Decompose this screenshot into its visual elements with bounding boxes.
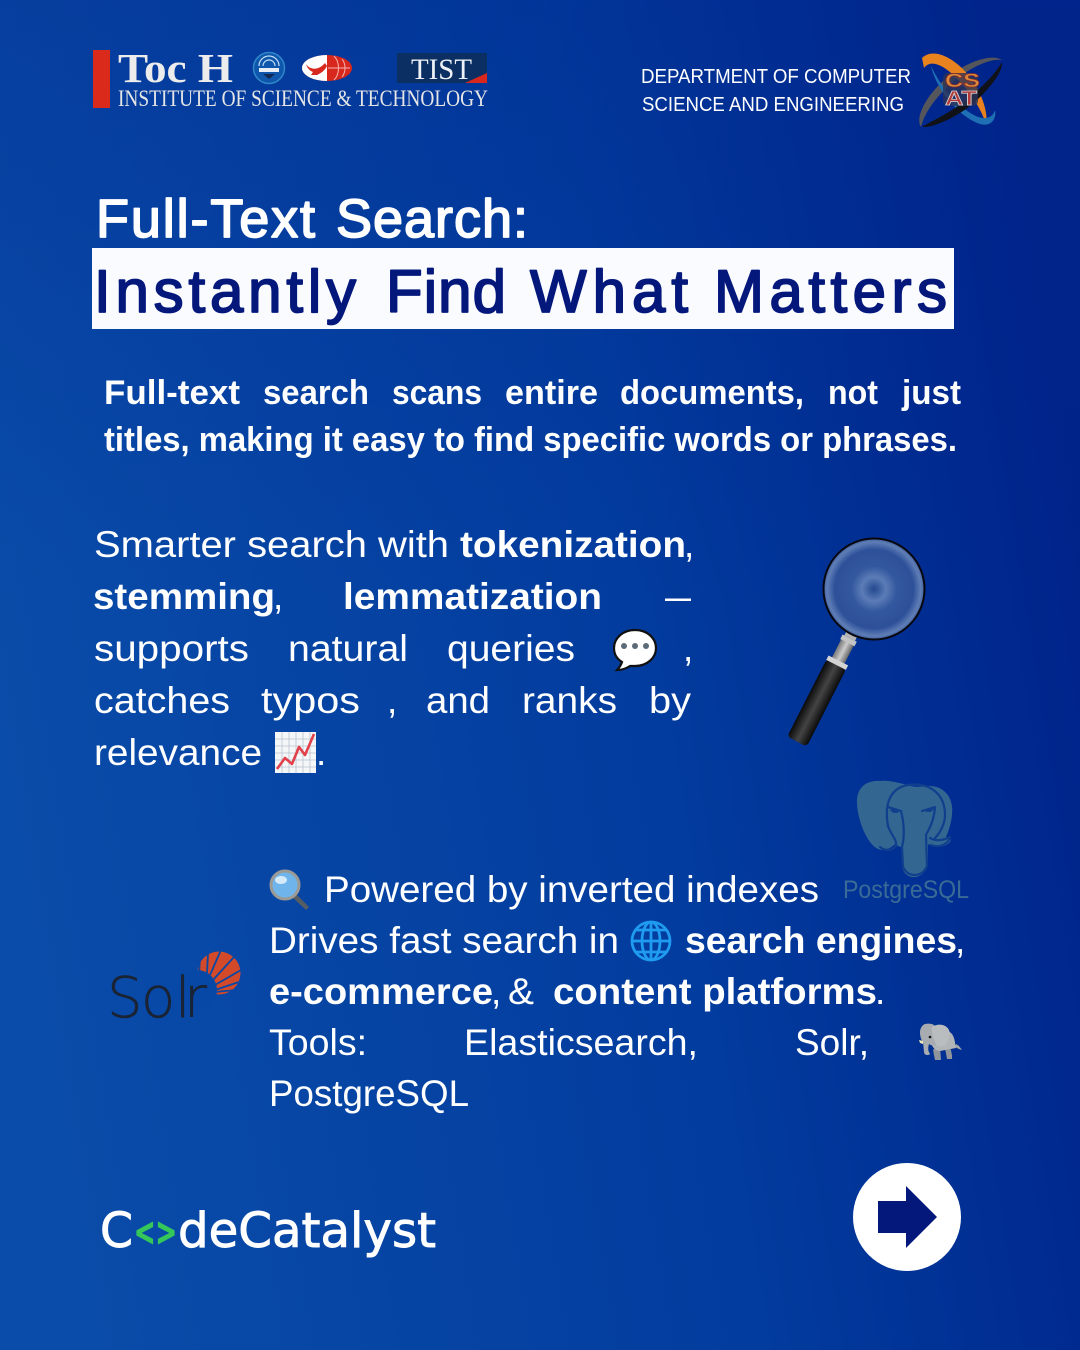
text: powered by inverted indexes: , — [955, 920, 965, 961]
text: powered by inverted indexes — [269, 869, 965, 1114]
logo: Toc H Institute of Science & Technology: TIST — [411, 53, 472, 86]
text: powered by inverted indexes: Drives fast search in — [269, 920, 619, 961]
title: Search: — [336, 189, 528, 249]
text: powered by inverted indexes: & — [508, 971, 534, 1012]
logo: CSAT: CS — [945, 71, 980, 92]
text: smarter search: lemmatization — [343, 576, 602, 617]
text: powered by inverted indexes: content platforms — [553, 971, 877, 1012]
logo: Solr — [107, 950, 241, 1031]
logo: CSAT: AT — [945, 88, 977, 110]
logo: CodeCatalyst: C — [100, 1203, 133, 1259]
text: smarter search: and — [426, 680, 490, 721]
text: powered by inverted indexes: Tools: — [269, 1022, 367, 1063]
text: powered by inverted indexes: e-commerce — [269, 971, 493, 1012]
text: smarter search: , — [387, 680, 397, 721]
text: smarter search: by — [649, 680, 692, 721]
logo: CSAT — [919, 53, 1002, 127]
intro text: scans — [392, 374, 482, 412]
intro text: not — [828, 374, 878, 412]
logo: PostgreSQL — [843, 781, 969, 904]
intro text — [104, 374, 961, 459]
title highlight — [92, 248, 954, 329]
icon: magnifying glass — [787, 538, 924, 747]
text: smarter search: tokenization — [460, 524, 686, 565]
text: smarter search: natural — [288, 628, 408, 669]
logo: Toc H Institute of Science & Technology: Toc H — [118, 45, 233, 91]
text: powered by inverted indexes: , — [491, 971, 501, 1012]
logo: CodeCatalyst: <> — [134, 1210, 177, 1254]
intro text: search — [263, 374, 369, 412]
text: powered by inverted indexes: PostgreSQL — [269, 1073, 469, 1114]
text: smarter search: typos — [261, 680, 360, 721]
text: smarter search: — — [665, 576, 691, 617]
text: smarter search: , — [684, 524, 694, 565]
title highlight: Find — [386, 258, 506, 325]
text: smarter search: catches — [94, 680, 230, 721]
department name: DEPARTMENT OF COMPUTER — [641, 66, 911, 88]
text: smarter search: , — [683, 628, 693, 669]
text: smarter search: . — [316, 732, 326, 773]
text: powered by inverted indexes: Solr, — [795, 1022, 869, 1063]
arrow button — [853, 1163, 961, 1271]
icon: globe — [632, 922, 670, 960]
icon: elephant emoji — [919, 1024, 962, 1060]
text: smarter search — [93, 524, 694, 773]
intro text: Full-text — [104, 374, 240, 412]
department name — [641, 66, 911, 116]
logo: Toc H Institute of Science & Technology: INSTITUTE OF SCIENCE & TECHNOLOGY — [118, 86, 488, 112]
logo: Solr: Solr — [107, 966, 207, 1031]
title highlight: What — [530, 258, 688, 325]
text: smarter search: , — [273, 576, 283, 617]
text: powered by inverted indexes: search engines — [685, 920, 957, 961]
logo: CodeCatalyst: deCatalyst — [178, 1203, 436, 1259]
title highlight: Matters — [714, 258, 947, 325]
icon: speech bubble — [614, 630, 656, 670]
text: smarter search: stemming — [93, 576, 275, 617]
intro text: just — [901, 374, 961, 412]
text: smarter search: ranks — [522, 680, 617, 721]
title: Full-Text — [96, 189, 315, 249]
intro text: documents, — [620, 374, 804, 412]
intro text: entire — [505, 374, 598, 412]
title highlight: Instantly — [94, 258, 356, 325]
department name: SCIENCE AND ENGINEERING — [642, 94, 904, 116]
icon: search magnifier emoji — [271, 871, 309, 910]
text: smarter search: supports — [94, 628, 249, 669]
text: smarter search: queries — [447, 628, 575, 669]
intro text: titles, making it easy to find specific words or phrases. — [104, 421, 957, 459]
text: powered by inverted indexes: Elasticsearch, — [464, 1022, 698, 1063]
title — [92, 189, 954, 329]
text: smarter search: relevance — [94, 732, 262, 773]
logo: PostgreSQL: PostgreSQL — [843, 876, 969, 904]
icon: chart increasing — [275, 732, 316, 773]
text: powered by inverted indexes: Powered by inverted indexes — [324, 869, 819, 910]
text: powered by inverted indexes: . — [875, 971, 885, 1012]
text: smarter search: Smarter search with — [94, 524, 449, 565]
logo: Toc H Institute of Science & Technology — [93, 45, 488, 112]
